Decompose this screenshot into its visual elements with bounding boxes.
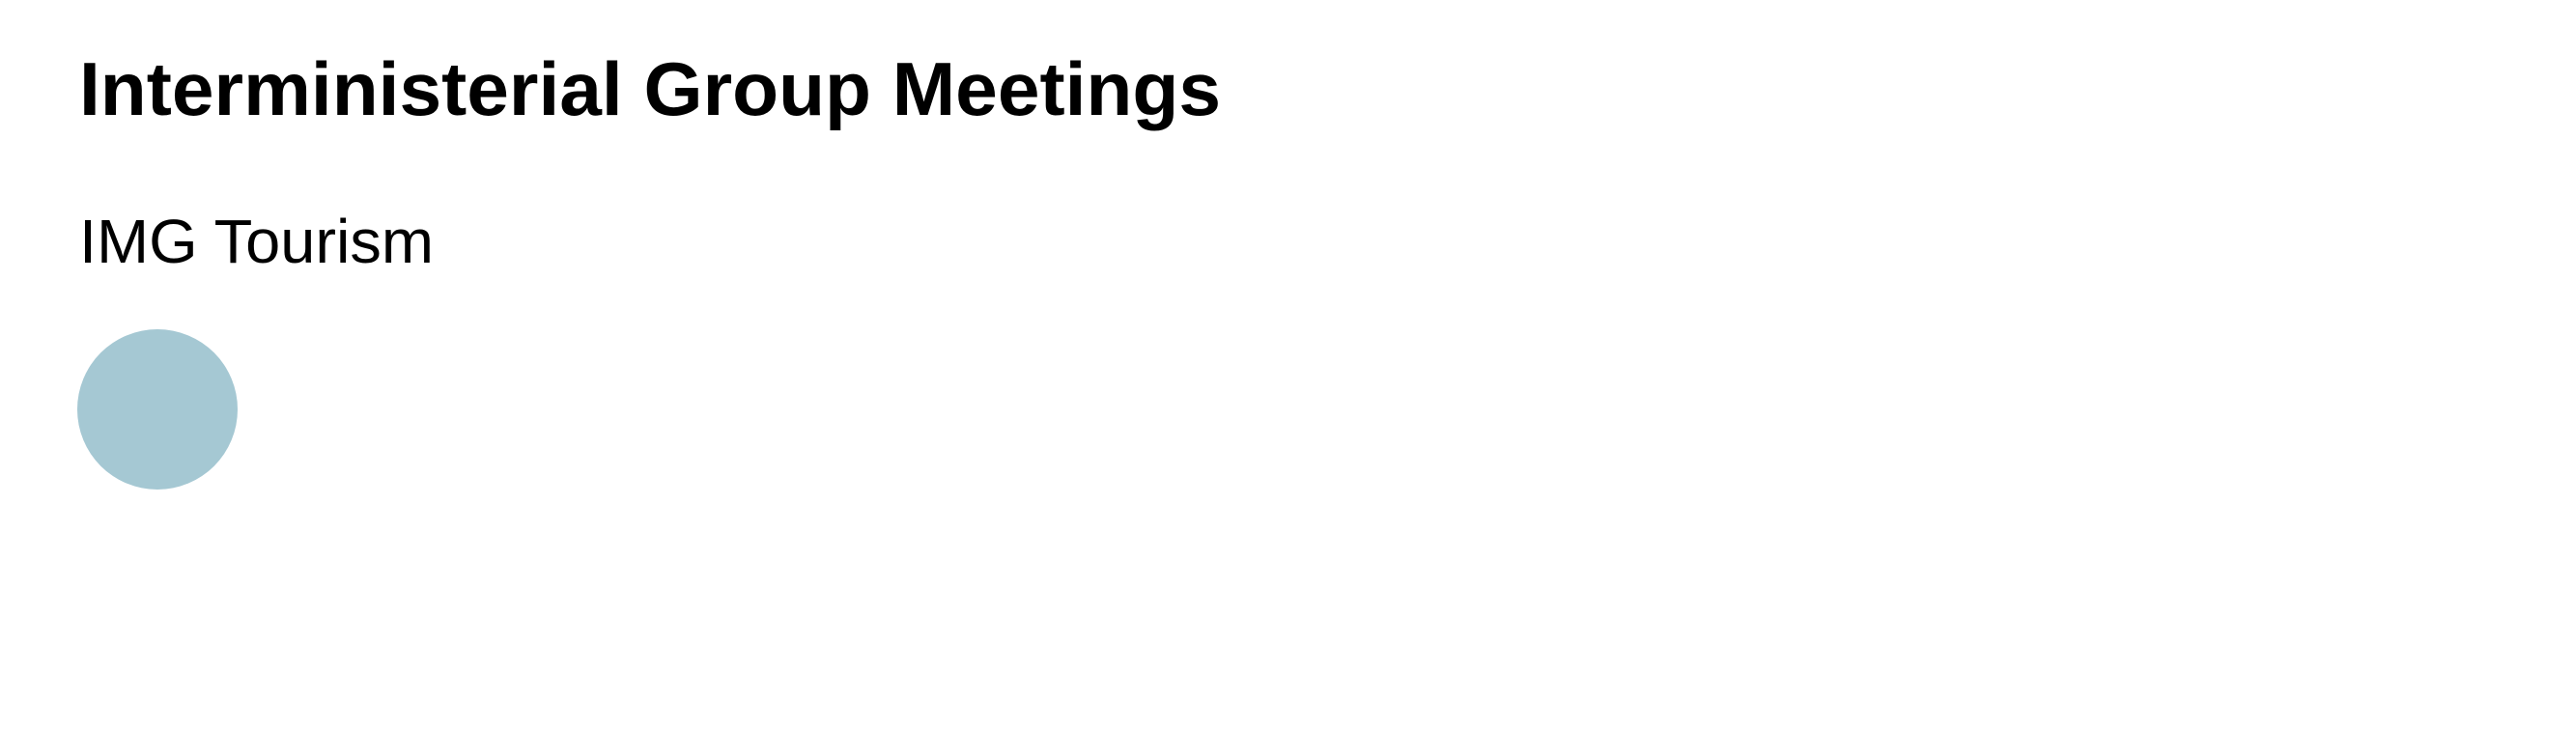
subtitle: IMG Tourism (79, 207, 434, 276)
title: Interministerial Group Meetings (79, 46, 1221, 131)
icon: circle marker (77, 329, 238, 490)
